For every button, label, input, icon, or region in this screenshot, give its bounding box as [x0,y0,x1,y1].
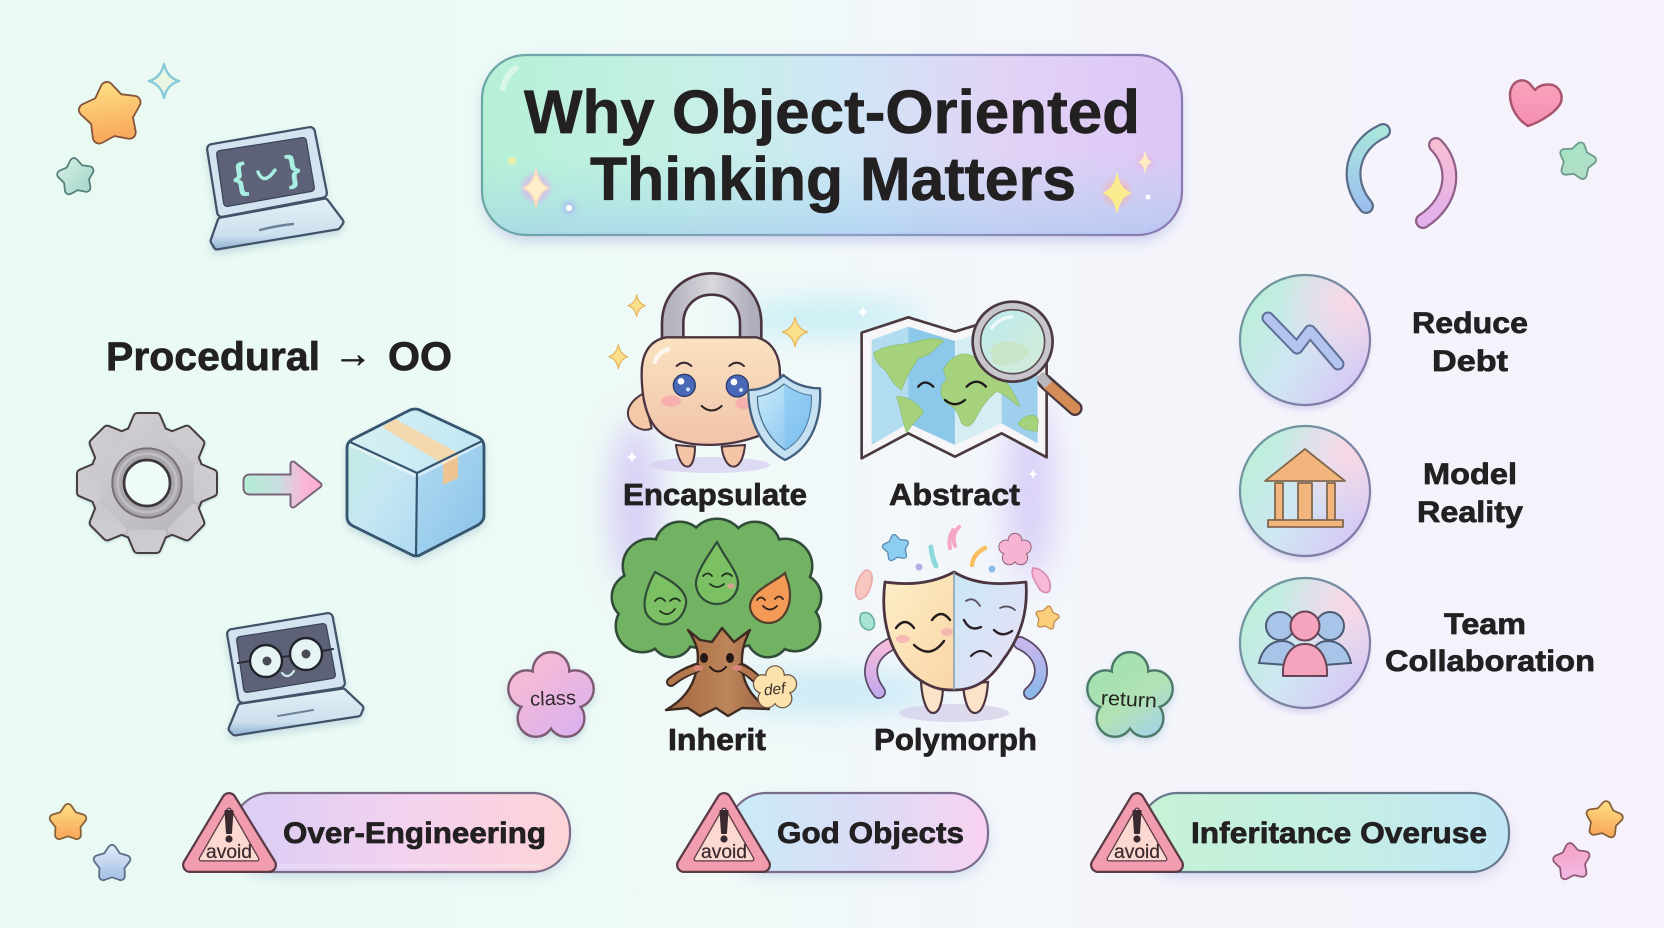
icon: downward trend circle [1240,275,1370,410]
icon: green leaf center [696,542,738,604]
heading [106,332,452,379]
badge: def: def [763,680,788,699]
icon: blue star [98,849,126,876]
icon: laptop with curly braces [212,132,340,246]
benefit: reduce debt [1240,275,1528,410]
icon: green leaf left [645,572,686,624]
icon: shield [748,375,820,460]
badge: class [509,653,593,736]
icon: orange star [83,84,139,139]
badge: def [754,666,796,707]
icon: orange star [1588,803,1620,834]
benefit: team collaboration [1240,578,1595,713]
label: Abstract [889,477,1020,512]
icon: sparkle [149,64,179,98]
panel: abstract [862,302,1075,512]
icon: mint star [60,160,92,191]
label: Inherit [668,722,766,757]
benefit: model reality: Reality [1417,496,1523,529]
panel: procedural to OO [81,332,490,732]
icon: orange leaf [750,573,790,623]
panel: inherit [613,520,820,757]
label: Reduce [1412,307,1528,340]
decoration: top-right heart, star and parentheses [1354,80,1594,221]
title banner [482,55,1182,242]
benefit: team collaboration: Collaboration [1385,645,1595,678]
center glow [611,304,1054,710]
decoration: bottom-right stars [1556,803,1620,876]
title text: Thinking Matters [590,145,1076,213]
icon: warning triangle [190,800,269,865]
panel: anti-patterns [190,793,1509,877]
icon: warning triangle: avoid [206,842,252,863]
heading: Procedural [106,335,320,379]
icon: green star [1560,143,1594,176]
badge: return [1088,653,1172,736]
label: Inferitance Overuse [1191,817,1487,850]
label: Model [1423,458,1517,491]
icon: temple circle [1240,426,1370,561]
decoration: top-left stars [60,64,179,191]
icon: laptop with curly braces: } [282,147,303,190]
icon: warning triangle [684,800,763,865]
pill: inheritance overuse [1098,793,1509,877]
sparkles [609,295,808,369]
icon: pink star [1556,845,1588,876]
benefit: reduce debt: Debt [1432,345,1508,378]
pill: over-engineering [190,793,570,877]
heading: OO [388,335,452,379]
pill: god objects [684,793,988,877]
confetti [856,527,1058,630]
icon: gear [81,417,213,549]
icon: right parenthesis [1423,145,1449,221]
icon: comedy tragedy mask [871,572,1041,722]
panel: encapsulate [609,284,820,512]
label: Encapsulate [623,477,807,512]
icon: smiling map with magnifier [862,302,1075,458]
icon: warning triangle [1098,800,1176,865]
icon: smiling tree [613,520,820,716]
decoration: bottom-left stars [54,808,126,876]
heading: → [334,332,372,376]
icon: warning triangle: avoid [1114,842,1160,863]
icon: heart [1510,80,1562,126]
panel: polymorph [856,527,1058,757]
title sparkles [508,152,1152,215]
arrow [246,464,319,505]
label: Team [1444,608,1526,641]
badge: class: class [530,687,576,711]
title text: Why Object-Oriented [524,78,1140,146]
icon: people circle [1240,578,1370,713]
icon: warning triangle: avoid [701,842,747,863]
title text [524,78,1140,213]
icon: box [340,402,490,560]
label: God Objects [777,817,964,850]
icon: smiling padlock with shield [609,284,820,473]
icon: left parenthesis [1354,131,1383,206]
label: Over-Engineering [283,817,546,850]
icon: laptop with glasses [232,618,360,732]
panel: benefits [1240,275,1595,713]
badge: return: return [1100,688,1157,712]
icon: laptop with curly braces: { [229,155,250,198]
benefit: model reality [1240,426,1523,561]
icon: orange star [54,808,82,835]
label: Polymorph [874,722,1037,757]
